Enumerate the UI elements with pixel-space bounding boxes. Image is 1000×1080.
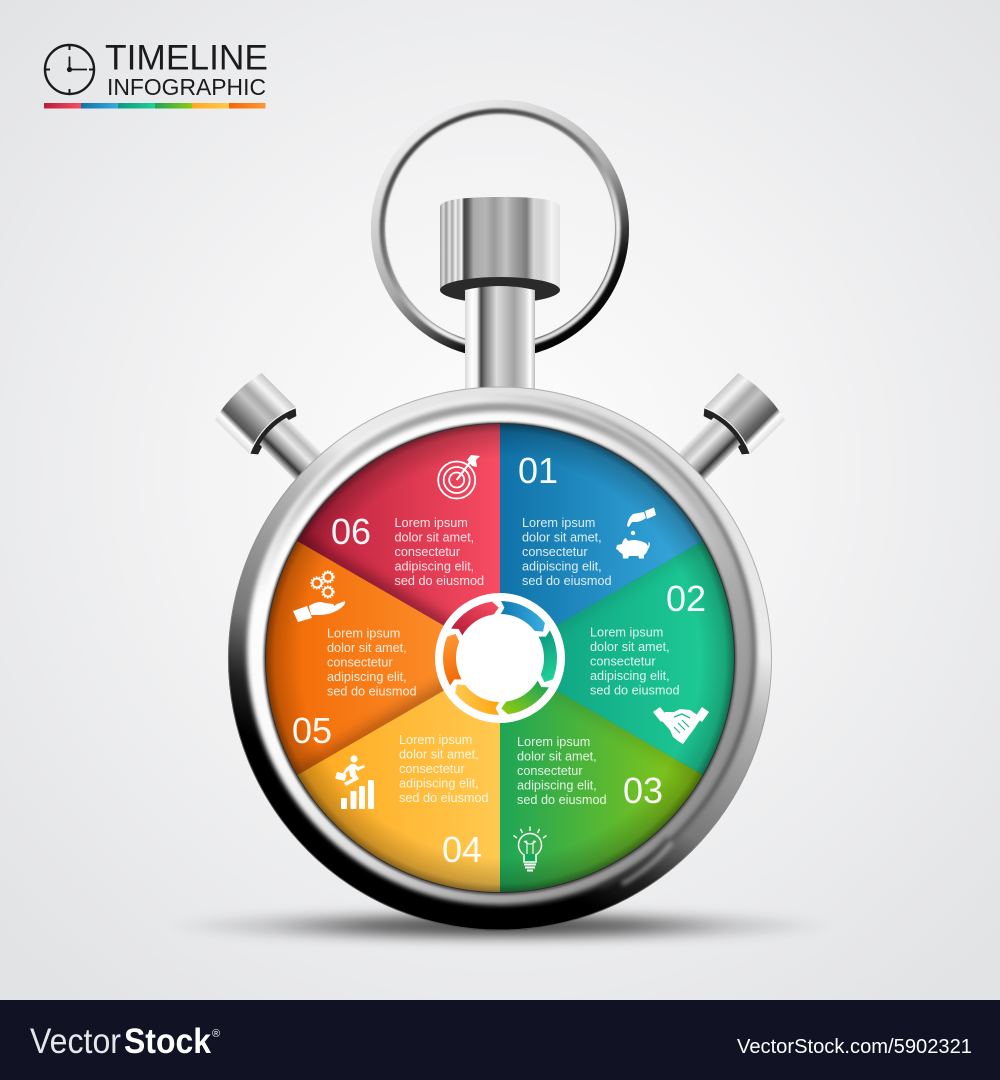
footer logo: [30, 1022, 220, 1061]
text block 05: Lorem ipsum: [327, 626, 400, 640]
icon: target and arrow: [438, 455, 480, 498]
color bar: [44, 103, 266, 108]
number 05: 05: [292, 710, 332, 751]
panel: segment 01: [500, 424, 702, 626]
crown knob: [440, 197, 560, 303]
text block 01: adipiscing elit,: [522, 560, 602, 574]
text block 01: sed do eiusmod: [522, 574, 612, 588]
text block 01: consectetur: [522, 545, 588, 559]
text block 02: Lorem ipsum: [590, 626, 663, 640]
panel: segment 02: [556, 541, 734, 775]
text block 01: Lorem ipsum: [522, 516, 595, 530]
right side button: [663, 370, 788, 495]
text block 04: sed do eiusmod: [399, 791, 489, 805]
text block 04: Lorem ipsum: [399, 733, 472, 747]
crown stem: [465, 286, 535, 395]
text block 06: dolor sit amet,: [394, 530, 474, 544]
text block 01: dolor sit amet,: [522, 530, 602, 544]
text block 05: dolor sit amet,: [327, 641, 407, 655]
text block 06: consectetur: [394, 545, 461, 559]
text block 03: sed do eiusmod: [517, 793, 607, 807]
left side button: [212, 370, 337, 495]
text block 02: adipiscing elit,: [590, 669, 670, 683]
text block 06: adipiscing elit,: [394, 560, 474, 574]
subheading: INFOGRAPHIC: [107, 74, 266, 100]
footer logo: Stock: [124, 1022, 211, 1061]
icon: handshake: [653, 707, 709, 744]
number 06: 06: [331, 511, 371, 552]
text block 06: Lorem ipsum: [394, 516, 468, 530]
footer bar: [0, 1000, 1000, 1080]
footer logo: ®: [212, 1028, 220, 1040]
text block 02: dolor sit amet,: [590, 640, 670, 654]
text block 03: Lorem ipsum: [517, 735, 590, 749]
dial face: [265, 423, 735, 893]
text block 05: adipiscing elit,: [327, 670, 407, 684]
center hub: [428, 591, 572, 725]
icon: hand holding gears: [293, 571, 345, 622]
icon: runner on bars: [335, 755, 374, 809]
text block 02: sed do eiusmod: [590, 684, 680, 698]
footer url: VectorStock.com/5902321: [737, 1036, 972, 1058]
text block 05: sed do eiusmod: [327, 684, 417, 698]
panel: segment 04: [298, 690, 500, 892]
text block 03: adipiscing elit,: [517, 778, 597, 792]
panel: segment 05: [266, 541, 444, 775]
text block 06: sed do eiusmod: [394, 574, 484, 588]
text block 04: dolor sit amet,: [399, 748, 479, 762]
text block 02: consectetur: [590, 654, 656, 668]
icon: piggy bank and hand: [616, 508, 656, 558]
ground shadow: [165, 907, 835, 945]
footer logo: Vector: [30, 1022, 121, 1061]
text block 04: consectetur: [399, 762, 465, 776]
metal case: [228, 386, 772, 930]
number 04: 04: [442, 829, 482, 870]
text block 03: dolor sit amet,: [517, 750, 597, 764]
icon: clock: [45, 45, 94, 94]
stopwatch loop ring: [372, 100, 628, 358]
panel: segment 03: [500, 690, 702, 892]
icon: light bulb: [514, 826, 546, 870]
text block 05: consectetur: [327, 656, 393, 670]
number 03: 03: [623, 770, 663, 811]
arrow ring: [428, 591, 572, 725]
heading: TIMELINE: [105, 38, 268, 78]
text block 04: adipiscing elit,: [399, 776, 479, 790]
logo: timeline infographic: [44, 38, 268, 108]
number 02: 02: [666, 578, 706, 619]
number 01: 01: [518, 450, 558, 491]
panel: segment 06: [298, 424, 500, 626]
text block 03: consectetur: [517, 764, 583, 778]
